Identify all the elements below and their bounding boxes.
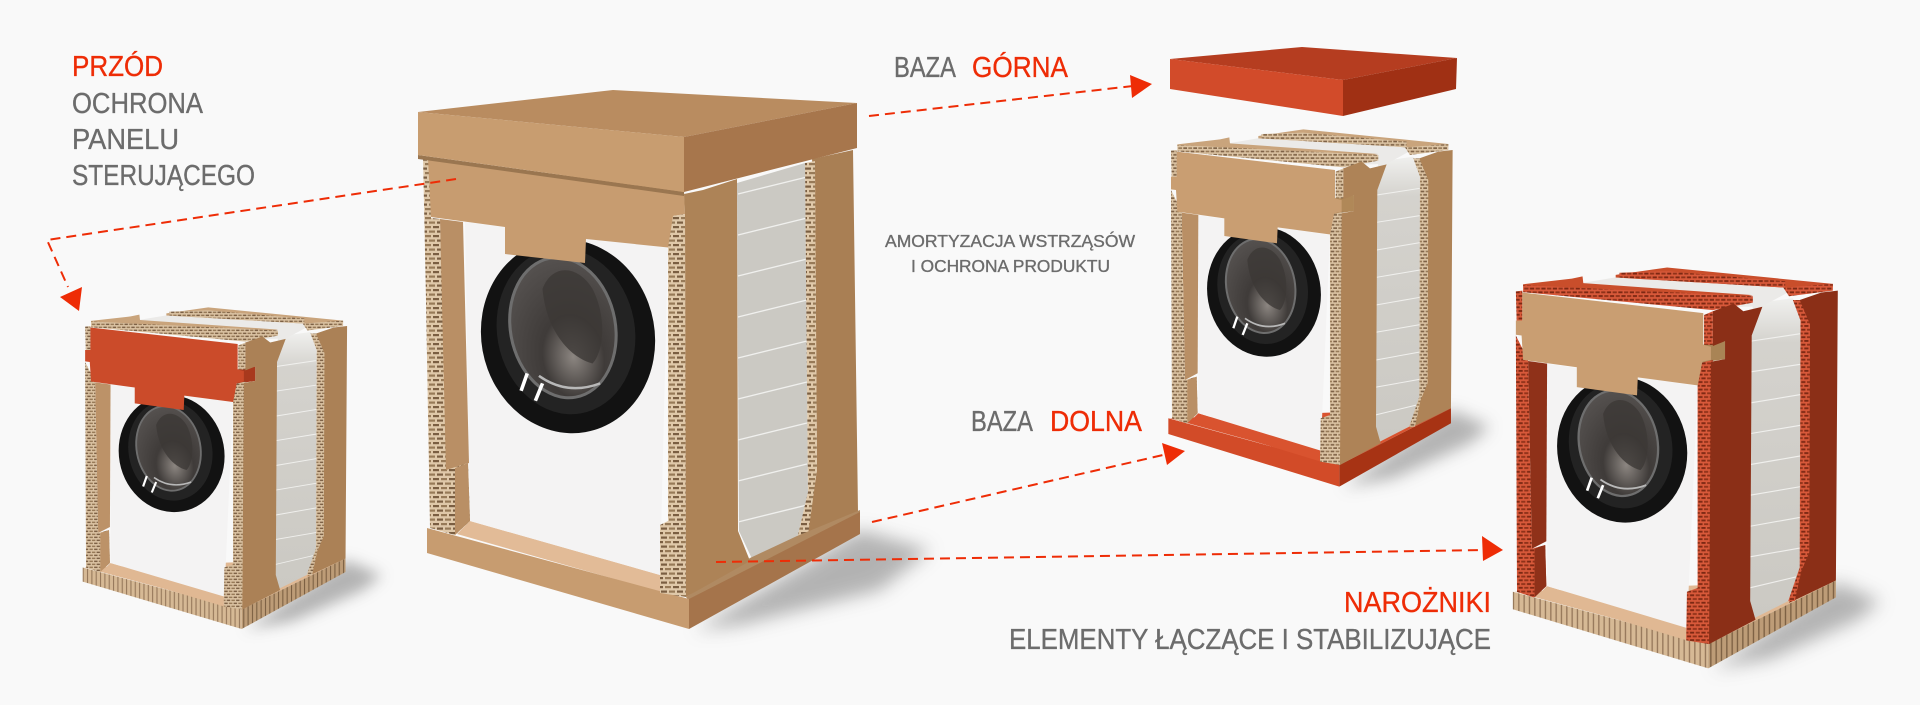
back right side panel [797,150,858,543]
arrow: to bottom base [872,443,1185,522]
label: top base [894,51,1069,84]
label: top base: GÓRNA [972,51,1069,84]
lid shadow line [418,155,684,196]
label: top base: BAZA [894,52,957,84]
label: bottom base [971,406,1143,438]
lower left tab face [455,463,470,535]
left inner panel [440,219,469,472]
label: bottom base: BAZA [971,406,1034,438]
washer front [465,222,668,575]
arrow: front label to left box [47,179,456,311]
label: shock absorption [885,230,1135,276]
base inner sliver [686,510,860,601]
top base in red [1170,47,1457,116]
lid front [418,112,684,192]
right box with red corners [1513,267,1880,669]
label: shock absorption: AMORTYZACJA WSTRZĄSÓW [885,230,1135,251]
base front [427,528,689,629]
lower left tab [430,463,470,535]
label: front: PRZÓD [72,50,163,83]
lid top [418,90,857,137]
label: front: PANELU [72,124,179,156]
label: corners [1009,586,1491,656]
label: front [72,50,255,192]
right corner honeycomb [660,214,686,597]
main cardboard packaging box [418,90,930,630]
base right [689,512,860,629]
left honeycomb strip [423,157,455,535]
lid [418,90,857,196]
front panel [425,158,685,263]
label: corners: NAROŻNIKI [1344,586,1491,619]
washer side with ribs [737,163,808,561]
label: bottom base: DOLNA [1050,406,1143,438]
front view box with red front panel [83,307,382,630]
label: shock absorption: I OCHRONA PRODUKTU [911,256,1110,276]
label: front: STERUJĄCEGO [72,160,255,192]
middle box with red bottom base [1168,129,1490,487]
box shadow [695,530,930,630]
base top [457,521,660,592]
arrow: to corners [716,536,1503,562]
label: front: OCHRONA [72,88,204,120]
lid right [684,103,857,192]
honeycomb strip right [797,161,817,539]
label: corners: ELEMENTY ŁĄCZĄCE I STABILIZUJĄCE [1009,624,1491,656]
washer door [465,226,671,447]
right side panel [684,179,750,597]
arrow: to top base [869,75,1152,116]
